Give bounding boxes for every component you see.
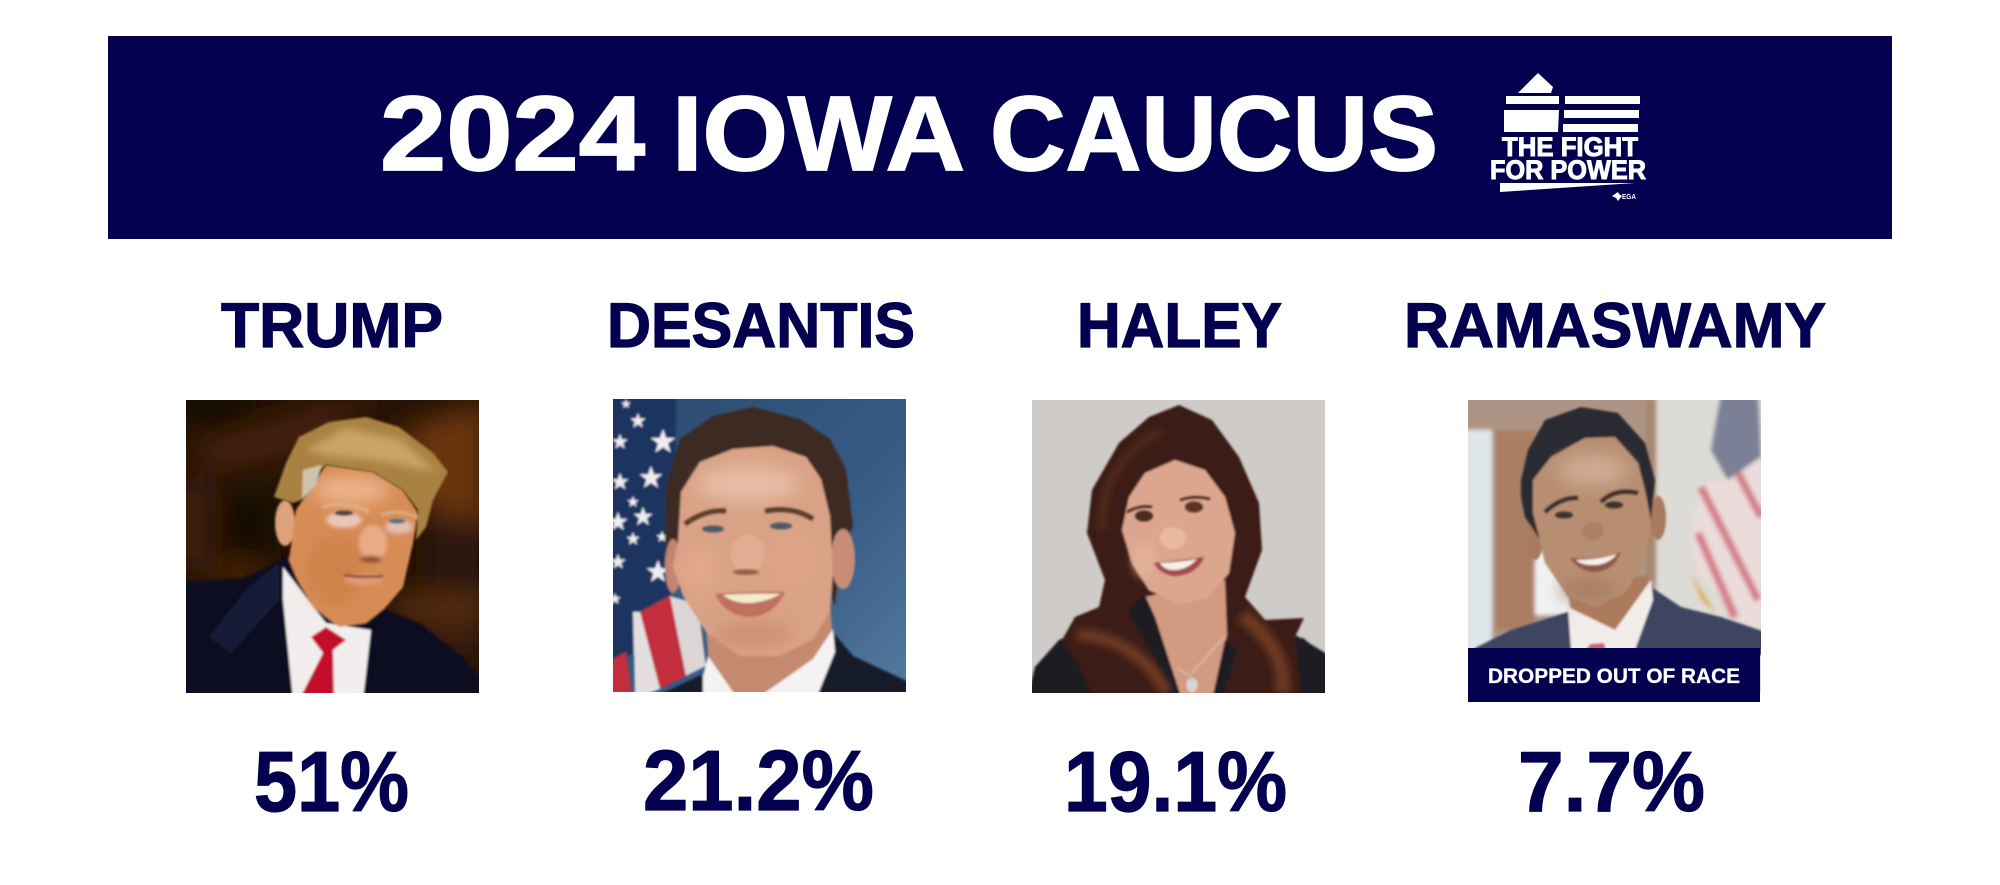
dropped out banner xyxy=(1468,648,1760,702)
face xyxy=(1122,460,1235,605)
flag xyxy=(608,394,676,664)
result: DeSantis: 21.2% xyxy=(643,734,874,829)
shirt xyxy=(283,567,371,700)
result: Trump: 51% xyxy=(254,735,409,830)
ears xyxy=(1650,496,1666,540)
neck and chest xyxy=(1145,580,1227,700)
hair xyxy=(665,407,853,606)
ears xyxy=(831,529,855,589)
result: Ramaswamy: 7.7% xyxy=(1518,735,1705,830)
logo: The Fight for Power: THE FIGHT xyxy=(1502,132,1638,162)
suit xyxy=(1475,587,1768,655)
header banner xyxy=(108,36,1892,239)
collar xyxy=(1127,595,1180,693)
hair xyxy=(1521,407,1655,540)
shirt xyxy=(700,655,735,692)
photo: Trump xyxy=(186,400,479,693)
face shading xyxy=(308,476,389,605)
sweater xyxy=(1033,634,1325,693)
hair xyxy=(274,417,448,540)
photo: DeSantis xyxy=(608,394,913,699)
flag xyxy=(1691,457,1761,630)
ear xyxy=(275,500,295,546)
logo: The Fight for Power xyxy=(1490,73,1646,201)
photo: Haley xyxy=(1027,400,1332,700)
face xyxy=(673,446,833,656)
tie xyxy=(301,626,347,693)
neck xyxy=(705,608,834,692)
face shading xyxy=(683,466,811,646)
dropped out banner: DROPPED OUT OF RACE xyxy=(1488,665,1740,688)
face xyxy=(1533,437,1651,607)
result: Haley: 19.1% xyxy=(1064,735,1287,830)
face xyxy=(289,465,418,627)
candidate name: Trump: TRUMP xyxy=(221,291,443,361)
hair highlights xyxy=(1077,430,1283,693)
hair xyxy=(1062,405,1304,700)
shirt xyxy=(1568,580,1653,650)
suit xyxy=(181,557,486,700)
candidate name: Haley: HALEY xyxy=(1077,291,1282,361)
title: CAUCUS xyxy=(990,75,1438,193)
photo: Ramaswamy xyxy=(1463,395,1768,702)
suit xyxy=(818,633,906,692)
title: IOWA xyxy=(672,75,965,193)
candidate name: Ramaswamy: RAMASWAMY xyxy=(1404,291,1826,361)
title xyxy=(380,75,1438,193)
logo: The Fight for Power: EGA xyxy=(1622,194,1636,201)
candidate name: DeSantis: DESANTIS xyxy=(607,291,915,361)
title: 2024 xyxy=(380,75,645,193)
neck xyxy=(1568,575,1653,636)
logo: The Fight for Power: FOR POWER xyxy=(1490,155,1646,185)
